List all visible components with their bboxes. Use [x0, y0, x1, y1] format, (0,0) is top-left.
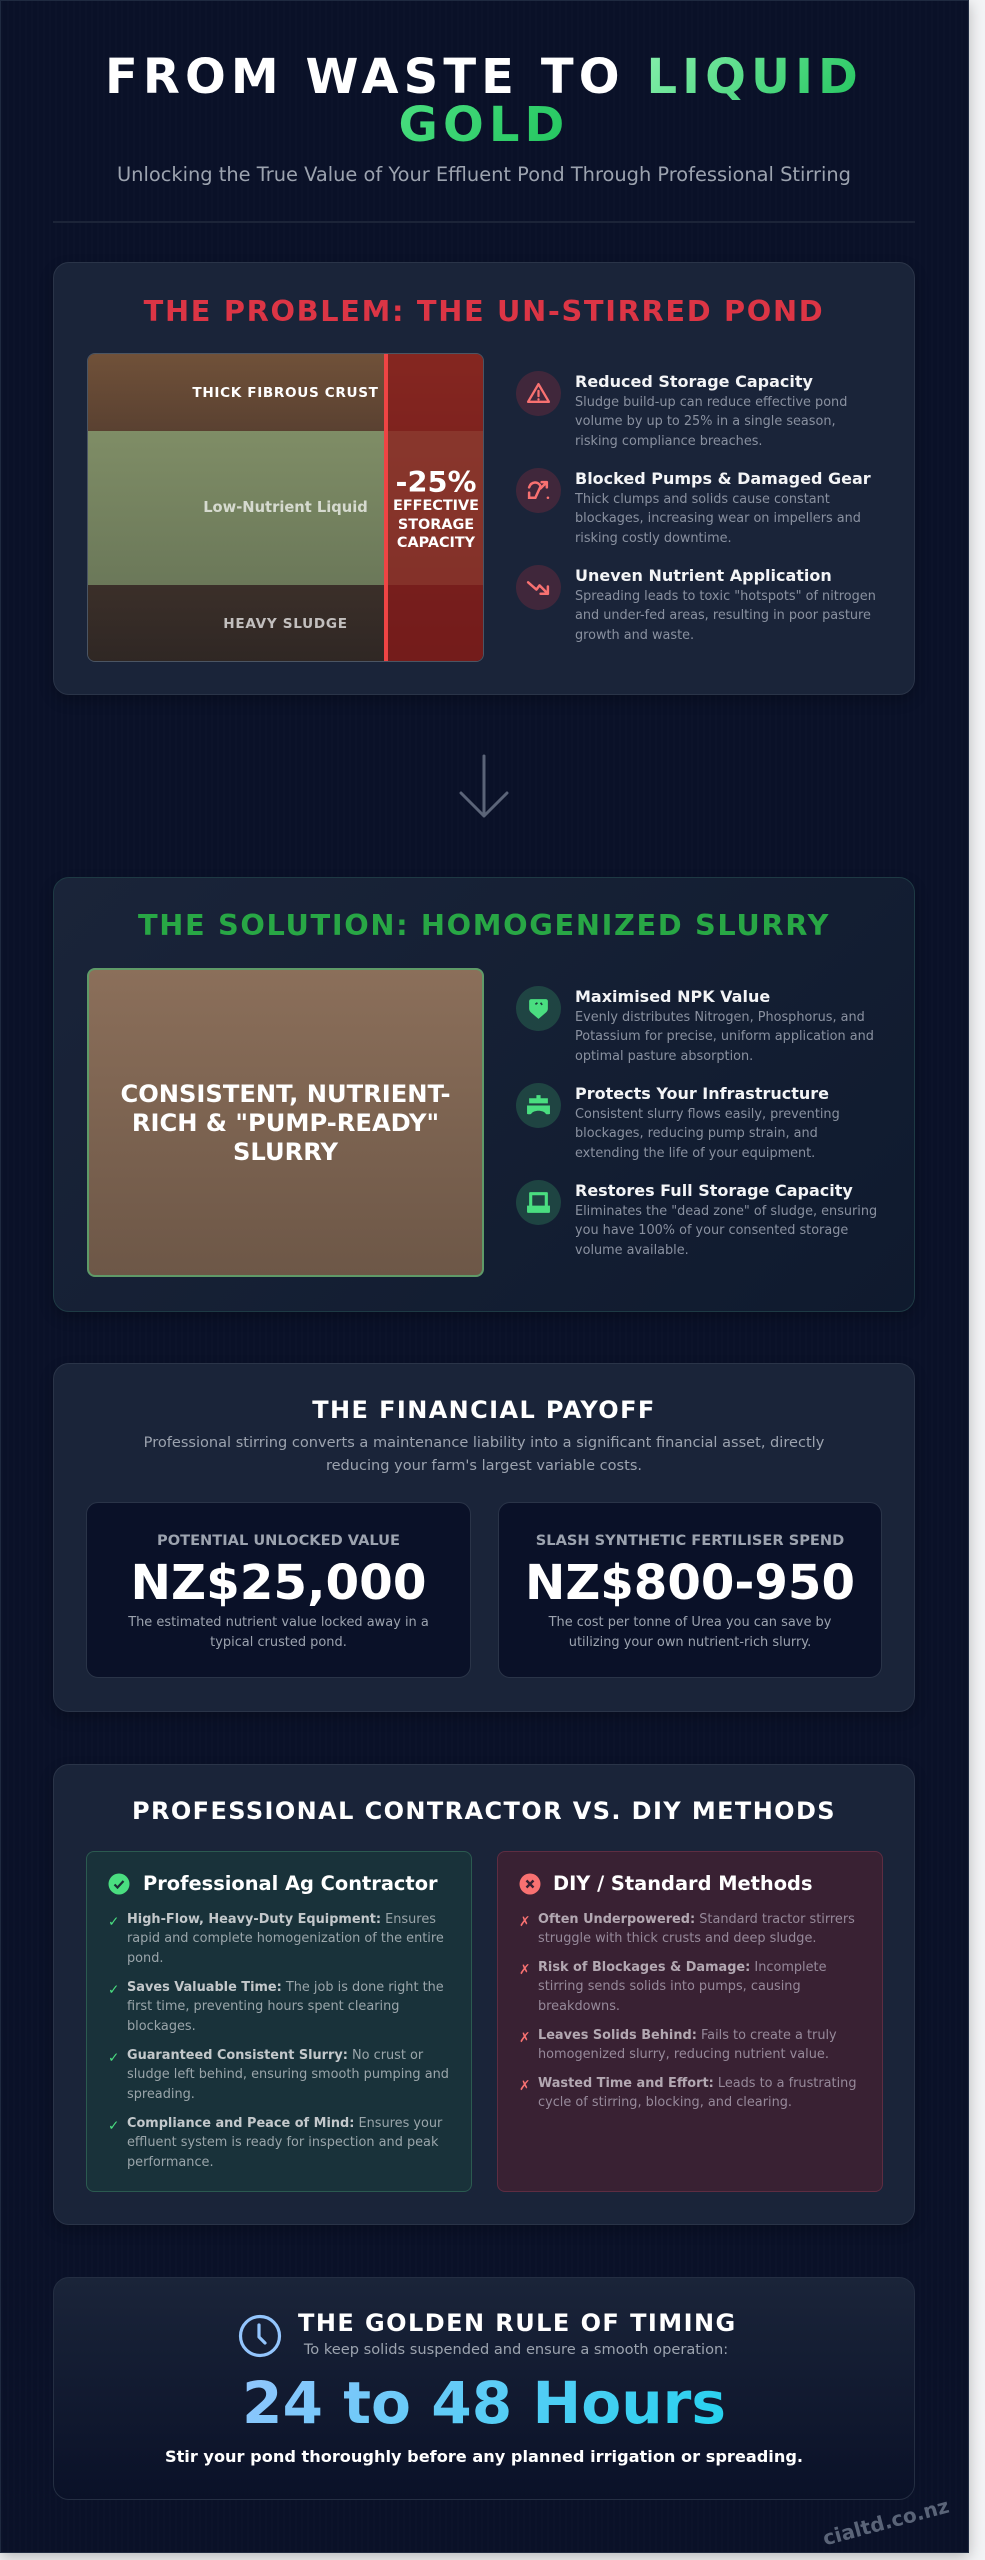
subtitle: Unlocking the True Value of Your Effluent Pond Through Professional Stirring: [117, 163, 851, 186]
slurry box: CONSISTENT, NUTRIENT-: [120, 1080, 451, 1108]
problem text: pumps: blockages, increasing wear on impellers and: [575, 511, 861, 526]
pro item 2: ✓: [108, 1982, 119, 1998]
panel: the problem: [53, 262, 915, 695]
layer: sludge: [88, 585, 483, 662]
column: diy methods: [497, 1851, 883, 2192]
slurry box: RICH & "PUMP-READY": [132, 1109, 439, 1137]
arrow: problem to solution: [460, 754, 508, 818]
card: fertiliser spend: utilizing your own nutrient-rich slurry.: [569, 1634, 811, 1650]
problem text: storage: [575, 395, 847, 449]
pro item 1: rapid and complete homogenization of the entire: [127, 1931, 444, 1946]
financial intro: Professional stirring converts a maintenance liability into a significant financial asset, directly: [144, 1434, 824, 1451]
card: unlocked value: The estimated nutrient value locked away in a: [128, 1615, 429, 1630]
diy item 4: [519, 2076, 856, 2110]
problem text: pumps: Thick clumps and solids cause constant: [575, 492, 830, 507]
pro item 3: ✓: [108, 2050, 119, 2066]
diy item 1: ✗: [519, 1914, 530, 1930]
diy item 1: [519, 1912, 855, 1946]
problem text: nutrients: [575, 589, 876, 643]
icon: cross circle: [520, 1874, 540, 1894]
icon: clock: [238, 2314, 282, 2358]
watermark: cialtd.co.nz: [820, 2494, 952, 2550]
pro item 4: effluent system is ready for inspection and peak: [127, 2135, 438, 2150]
icon: check circle: [108, 1874, 130, 1894]
overlay: lost capacity: STORAGE: [398, 516, 474, 532]
diy item 4: ✗: [519, 2078, 530, 2094]
diy item 2: Risk of Blockages & Damage: Incomplete: [538, 1960, 827, 1975]
card: unlocked value: [86, 1502, 471, 1678]
problem text: pumps: risking costly downtime.: [575, 531, 732, 546]
overlay: lost capacity: -25%: [396, 465, 476, 499]
diy item 1: Often Underpowered: Standard tractor stirrers: [538, 1912, 855, 1927]
heading: the solution: THE SOLUTION: HOMOGENIZED SLURRY: [138, 908, 830, 942]
icon: trending down: [516, 565, 561, 610]
icon: blocked pump: [516, 468, 561, 513]
overlay: lost capacity: EFFECTIVE: [393, 498, 479, 514]
card: unlocked value: typical crusted pond.: [210, 1634, 347, 1650]
icon: storage: [516, 1180, 561, 1225]
solution text: infrastructure: [575, 1107, 840, 1161]
card: unlocked value: NZ$25,000: [130, 1555, 426, 1611]
problem text: storage: risking compliance breaches.: [575, 434, 763, 449]
golden rule subtitle: To keep solids suspended and ensure a smooth operation:: [304, 2341, 728, 2358]
card: fertiliser spend: [498, 1502, 882, 1678]
title: FROM WASTE TO LIQUID: [105, 49, 863, 105]
slurry box: [87, 968, 484, 1277]
solution item: infrastructure: Protects Your Infrastructure: [575, 1084, 829, 1103]
diy item 3: ✗: [519, 2030, 530, 2046]
problem item: nutrients: Uneven Nutrient Application: [575, 566, 832, 585]
pro item 2: blockages.: [127, 2019, 196, 2034]
diy item 4: Wasted Time and Effort: Leads to a frustrating: [538, 2076, 856, 2091]
solution text: npk: Potassium for precise, uniform application and: [575, 1029, 874, 1044]
solution text: storage: Eliminates the "dead zone" of sludge, ensuring: [575, 1204, 877, 1219]
solution text: npk: Evenly distributes Nitrogen, Phosphorus, and: [575, 1010, 865, 1025]
solution text: storage: volume available.: [575, 1243, 689, 1258]
diy item 2: [519, 1960, 827, 2014]
solution text: infrastructure: blockages, reducing pump strain, and: [575, 1126, 818, 1141]
problem text: storage: volume by up to 25% in a single season,: [575, 414, 836, 429]
pro item 1: ✓: [108, 1914, 119, 1930]
pro item 1: pond.: [127, 1951, 163, 1966]
pro item 4: Compliance and Peace of Mind: Ensures your: [127, 2116, 442, 2131]
financial intro: reducing your farm's largest variable costs.: [326, 1456, 642, 1474]
diy item 4: cycle of stirring, blocking, and clearing.: [538, 2095, 792, 2110]
heading: contractor vs diy: PROFESSIONAL CONTRACTOR VS. DIY METHODS: [132, 1797, 836, 1825]
diy item 1: struggle with thick crusts and deep sludge.: [538, 1931, 816, 1946]
problem text: pumps: [574, 492, 861, 546]
pro item 3: Guaranteed Consistent Slurry: No crust or: [127, 2048, 423, 2063]
card: fertiliser spend: NZ$800-950: [525, 1555, 855, 1611]
panel: financial payoff: [53, 1363, 915, 1712]
diy item 3: [519, 2028, 837, 2062]
timing value: 24 to 48 Hours: [242, 2369, 726, 2437]
pro item 1: [108, 1912, 444, 1966]
layer: crust: THICK FIBROUS CRUST: [192, 385, 379, 401]
solution text: storage: you have 100% of your consented storage: [575, 1223, 848, 1238]
title: GOLD: [398, 97, 570, 153]
pond cross-section diagram: [87, 353, 484, 662]
pro item 1: High-Flow, Heavy-Duty Equipment: Ensures: [127, 1912, 436, 1927]
pro item 4: performance.: [127, 2155, 214, 2170]
card: fertiliser spend: SLASH SYNTHETIC FERTILISER SPEND: [536, 1532, 844, 1549]
heading: diy methods: DIY / Standard Methods: [553, 1872, 812, 1895]
problem text: nutrients: Spreading leads to toxic "hotspots" of nitrogen: [575, 589, 876, 604]
financial intro: [144, 1434, 824, 1474]
card: unlocked value: POTENTIAL UNLOCKED VALUE: [157, 1532, 400, 1549]
icon: infrastructure: [516, 1083, 561, 1128]
diy item 2: stirring sends solids into pumps, causing: [538, 1979, 801, 1994]
solution text: infrastructure: extending the life of your equipment.: [575, 1146, 815, 1161]
timing note: Stir your pond thoroughly before any planned irrigation or spreading.: [165, 2447, 803, 2466]
heading: golden rule: THE GOLDEN RULE OF TIMING: [298, 2309, 737, 2337]
pro item 3: spreading.: [127, 2087, 195, 2102]
overlay: lost capacity: [384, 354, 484, 662]
panel: golden rule: [53, 2277, 915, 2500]
solution text: npk: optimal pasture absorption.: [575, 1049, 753, 1064]
pro item 2: first time, preventing hours spent clearing: [127, 1999, 399, 2014]
problem text: nutrients: and under-fed areas, resulting in poor pasture: [575, 608, 871, 623]
heading: financial payoff: THE FINANCIAL PAYOFF: [312, 1396, 656, 1424]
pro item 2: Saves Valuable Time: The job is done right the: [127, 1980, 444, 1995]
solution text: infrastructure: Consistent slurry flows easily, preventing: [575, 1107, 840, 1122]
layer: sludge: HEAVY SLUDGE: [223, 616, 348, 632]
problem item: storage: Reduced Storage Capacity: [575, 372, 813, 391]
layer: crust: [88, 354, 483, 431]
column: professional contractor: [86, 1851, 472, 2192]
layer: liquid: [88, 431, 483, 585]
pro item 4: [108, 2116, 442, 2170]
diy item 2: ✗: [519, 1962, 530, 1978]
card: fertiliser spend: The cost per tonne of Urea you can save by: [549, 1615, 831, 1630]
heading: professional contractor: Professional Ag Contractor: [143, 1872, 438, 1895]
pro item 3: [108, 2048, 449, 2102]
solution text: npk: [575, 1010, 874, 1064]
pro item 4: ✓: [108, 2118, 119, 2134]
slurry box: SLURRY: [233, 1138, 338, 1166]
problem text: storage: Sludge build-up can reduce effective pond: [575, 395, 847, 410]
diy item 3: homogenized slurry, reducing nutrient value.: [538, 2047, 829, 2062]
title: [105, 49, 863, 153]
pro item 2: [108, 1980, 444, 2034]
solution item: npk: Maximised NPK Value: [575, 987, 770, 1006]
problem text: nutrients: growth and waste.: [575, 628, 694, 643]
solution text: storage: [575, 1204, 877, 1258]
panel: the solution: [53, 877, 915, 1312]
solution item: storage: Restores Full Storage Capacity: [575, 1181, 853, 1200]
diy item 2: breakdowns.: [538, 1999, 620, 2014]
heading: the problem: THE PROBLEM: THE UN-STIRRED POND: [144, 294, 824, 328]
panel: contractor vs diy: [53, 1764, 915, 2225]
icon: warning: [516, 371, 561, 416]
problem item: pumps: Blocked Pumps & Damaged Gear: [575, 469, 871, 488]
icon: npk: [516, 986, 561, 1031]
layer: liquid: Low-Nutrient Liquid: [203, 499, 368, 516]
overlay: lost capacity: CAPACITY: [397, 535, 475, 551]
diy item 3: Leaves Solids Behind: Fails to create a truly: [538, 2028, 837, 2043]
pro item 3: sludge left behind, ensuring smooth pumping and: [127, 2067, 449, 2082]
